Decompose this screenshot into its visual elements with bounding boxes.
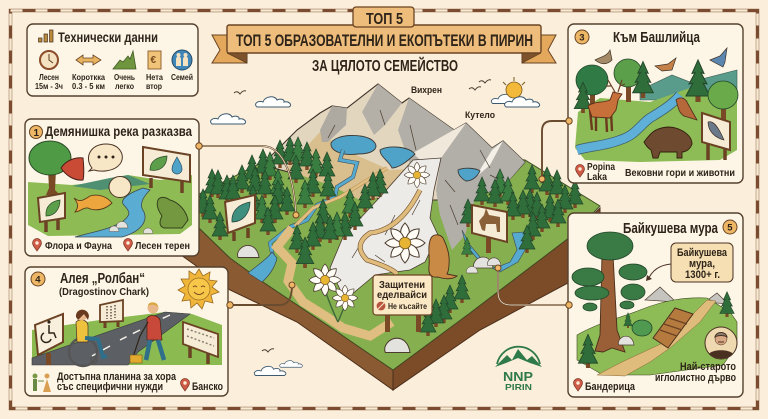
old pine tree	[572, 232, 647, 352]
metric labels: легко	[115, 81, 134, 91]
description: Достъпна планина за хора	[57, 371, 177, 383]
scene: ground	[577, 298, 737, 375]
small conifers and bush	[578, 292, 734, 368]
panel 3: To Bashliytsa	[568, 24, 743, 183]
metric labels: Нета	[146, 72, 163, 82]
location pin: Laka	[587, 171, 607, 183]
metric labels	[35, 72, 193, 91]
sign: protected edelweiss: еделвайси	[377, 290, 427, 301]
icon: bars	[38, 30, 53, 42]
sign: leaf	[225, 195, 255, 241]
deer	[588, 80, 625, 132]
clouds and birds in the sky	[211, 80, 523, 376]
river	[255, 150, 357, 272]
peak labels: Вихрен	[411, 85, 442, 96]
caption	[655, 361, 736, 384]
sign: protected edelweiss: Не късайте	[388, 302, 427, 311]
standing bird	[676, 98, 697, 120]
number badge: 3	[579, 32, 585, 44]
peak labels: Кутело	[465, 110, 495, 121]
logo: NNP Pirin: PIRIN	[505, 382, 532, 392]
scene: river	[577, 95, 680, 150]
panel heading: Байкушева мура	[623, 221, 719, 237]
icons: accessibility people	[32, 374, 51, 392]
number badge	[723, 220, 737, 234]
road markings	[92, 315, 170, 356]
icon: sun with clouds	[503, 77, 540, 107]
location	[574, 378, 636, 393]
scene: trail	[597, 300, 716, 376]
sign: bird	[702, 113, 730, 160]
fish	[74, 195, 112, 212]
3D terrain block	[181, 84, 600, 390]
metric labels: 15м - 3ч	[35, 81, 63, 91]
panel heading: Технически данни	[58, 30, 158, 45]
sign: protected edelweiss: Защитени	[379, 280, 425, 291]
top badge: ТОП 5	[366, 11, 403, 28]
road	[32, 312, 190, 365]
title banner	[212, 7, 556, 75]
right stream	[462, 230, 528, 272]
number badge	[575, 30, 589, 44]
icon: receipt: €	[150, 55, 156, 66]
sign: accessibility	[35, 314, 63, 365]
top badge	[353, 7, 414, 28]
boar	[644, 127, 692, 158]
flying birds	[595, 48, 727, 71]
panel 5: Baykushev pine	[568, 213, 743, 397]
lakes	[331, 135, 480, 181]
hiking path	[277, 168, 392, 336]
connector lines	[199, 121, 569, 305]
panel heading: Демянишка река разказва	[45, 124, 192, 139]
location pins and labels	[32, 238, 190, 252]
tree	[29, 141, 71, 195]
edelweiss flowers	[309, 162, 430, 322]
callout: Байкушева	[677, 247, 728, 259]
description	[57, 371, 177, 393]
callout	[646, 243, 733, 282]
number badge	[30, 126, 42, 139]
number badge: 4	[35, 274, 41, 286]
caption: Вековни гори и животни	[625, 167, 735, 179]
river	[75, 188, 150, 237]
caption: Най-старото	[680, 361, 736, 373]
panel 1: Demyanishka river	[25, 119, 199, 256]
portrait	[705, 327, 737, 359]
logo: NNP Pirin	[495, 347, 542, 392]
peak labels	[411, 85, 495, 121]
location pins and labels: Лесен терен	[135, 240, 190, 252]
metric labels: Очень	[114, 72, 135, 82]
mountains	[262, 84, 525, 250]
scene ground	[32, 312, 222, 365]
frog	[157, 197, 188, 228]
logo: NNP Pirin: NNP	[503, 369, 533, 384]
icon: receipt	[148, 51, 161, 69]
metric labels: втор	[146, 81, 162, 91]
main banner	[227, 25, 541, 53]
grass surface	[197, 150, 600, 370]
sign: protected edelweiss	[373, 275, 432, 332]
panel 4: Rolban alley	[25, 267, 228, 396]
subtitle: ЗА ЦЯЛОТО СЕМЕЙСТВО	[312, 57, 458, 75]
pebbles	[109, 221, 153, 234]
icon: lips	[61, 158, 84, 180]
sign: leaf and water	[143, 147, 190, 193]
icon: smiling sun	[178, 269, 219, 309]
number badge: 1	[34, 128, 40, 139]
caption: иглолистно дърво	[655, 372, 736, 384]
metric labels: Короткка	[72, 72, 105, 82]
woman in wheelchair	[69, 310, 107, 366]
sign: braille	[100, 300, 123, 328]
rocks	[238, 245, 501, 352]
panel connector dots	[196, 118, 572, 308]
location: Бандерица	[585, 381, 636, 393]
panel heading: Алея „Ролбан“	[60, 271, 145, 287]
metric labels: Семей	[171, 72, 193, 82]
soil sides	[181, 228, 393, 390]
man with cane	[130, 302, 164, 363]
icon: clock	[40, 51, 58, 69]
main banner: ТОП 5 ОБРАЗОВАТЕЛНИ И ЕКОПЪТЕКИ В ПИРИН	[236, 31, 533, 50]
forest trees	[195, 137, 583, 336]
location pin	[576, 161, 615, 183]
callout: 1300+ г.	[685, 269, 720, 281]
location pins and labels: Флора и Фауна	[45, 240, 112, 252]
scene: distant peaks	[645, 287, 728, 304]
sign: ibex	[472, 205, 507, 253]
description: със специфични нужди	[57, 381, 163, 393]
ribbon tails	[212, 35, 556, 63]
icon: arrows	[76, 55, 101, 65]
location	[180, 378, 223, 393]
soil right side	[393, 208, 600, 390]
panel subheading: (Dragostinov Chark)	[59, 286, 149, 298]
wooden stairs	[653, 308, 693, 348]
metric labels: 0.3 - 5 км	[72, 81, 105, 91]
speech bubbles	[88, 144, 131, 198]
callout: мура,	[689, 258, 715, 270]
icon: family	[172, 50, 192, 70]
marmot	[429, 235, 457, 279]
sign: tactile map	[183, 322, 218, 364]
ribbon folds	[227, 53, 541, 63]
white rock slope	[330, 158, 441, 300]
location: Банско	[192, 381, 223, 393]
location pin: Popina	[587, 161, 615, 173]
panel: technical data	[27, 24, 198, 96]
metric labels: Лесен	[39, 72, 59, 82]
icon: mountain	[113, 51, 136, 69]
scene ground	[28, 175, 192, 236]
sign: leaf	[38, 193, 65, 232]
scene: hills and meadow	[575, 70, 737, 162]
scene: trees	[574, 59, 738, 122]
number badge	[31, 272, 45, 286]
number badge: 5	[727, 222, 733, 234]
panel heading: Към Башлийца	[613, 30, 701, 46]
